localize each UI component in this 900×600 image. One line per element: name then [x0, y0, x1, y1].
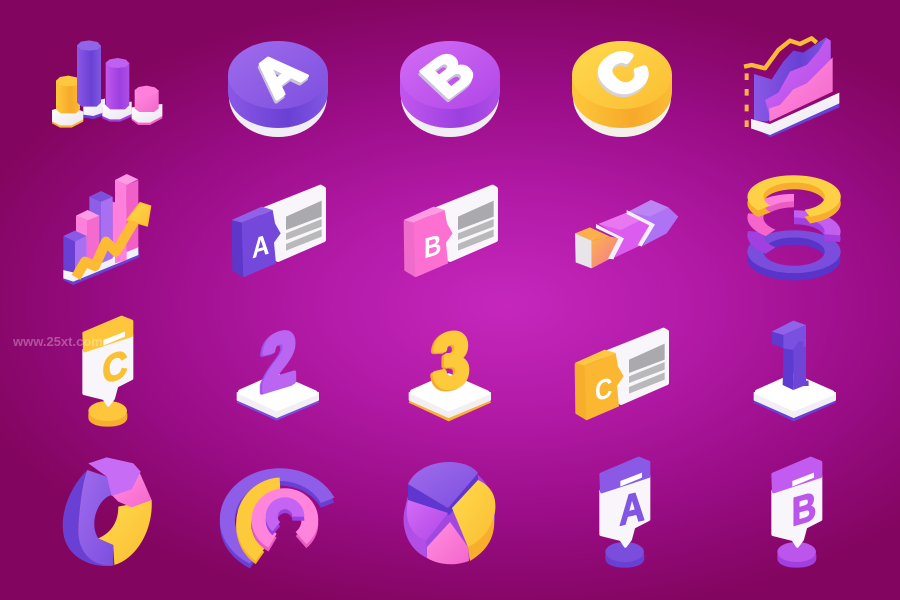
button base: [573, 57, 671, 137]
stand side: [605, 554, 644, 568]
number 2: 2: [262, 313, 296, 407]
grey line 1: [286, 219, 322, 240]
first chevron: [596, 224, 624, 259]
stand side: [777, 554, 816, 568]
icon: segmented arrow: [575, 200, 678, 268]
icon: number 3 on platform: [409, 316, 491, 421]
grey block: [458, 201, 494, 230]
purple arc top: [227, 475, 328, 558]
pink ring left part: [755, 214, 771, 233]
icon: button C: [572, 39, 672, 137]
icon: radial bar chart: [227, 475, 328, 563]
violet bar: [106, 63, 129, 109]
yellow segment: [98, 500, 152, 565]
number 1 flag left: [772, 332, 783, 348]
platform side: [237, 393, 318, 417]
card white body: [434, 187, 496, 260]
platform edge: [237, 383, 319, 421]
purple wedge side: [408, 473, 478, 515]
card side: [233, 221, 243, 276]
pink arc top: [260, 496, 310, 541]
card front: [242, 210, 281, 277]
platform top: [758, 376, 832, 409]
violet wedge: [407, 500, 448, 541]
letter B: B: [792, 484, 816, 536]
second segment: [598, 213, 653, 257]
letter A: A: [240, 41, 317, 108]
number 3: 3: [434, 316, 469, 404]
blue ring top: [755, 234, 833, 269]
pink bar base: [132, 105, 162, 125]
card top edge: [232, 207, 273, 223]
pie silhouette: [405, 464, 495, 564]
cap label bar: [620, 473, 642, 487]
letter C: C: [583, 39, 663, 108]
button top: [228, 41, 328, 109]
card side: [576, 364, 586, 419]
card side: [405, 221, 415, 276]
grey line 2: [629, 372, 665, 394]
stand top: [88, 401, 127, 421]
letter A: A: [619, 483, 645, 535]
platform edge: [754, 383, 836, 421]
yellow arc side: [244, 488, 280, 558]
button side: [400, 75, 500, 128]
button base: [401, 57, 499, 137]
icon: info card A: [232, 187, 324, 277]
number 1 flag front: [783, 325, 806, 350]
purple segment: [78, 470, 113, 566]
yellow bar: [56, 81, 80, 113]
cap: [773, 458, 821, 492]
icon: pin A: [601, 458, 649, 568]
cap label bar: [792, 473, 814, 487]
icon: info card B: [404, 187, 496, 277]
number 1 top face: [772, 321, 806, 335]
yellow ring top: [755, 179, 833, 213]
card white body: [605, 330, 667, 403]
violet bar base: [102, 103, 132, 122]
second segment top: [598, 213, 641, 230]
pin body: [773, 476, 821, 546]
violet wedge side: [404, 500, 427, 558]
icon: area chart: [744, 37, 839, 137]
blue area: [754, 37, 831, 122]
letter C: C: [103, 341, 127, 392]
violet ring right top: [794, 214, 833, 235]
pin body: [84, 335, 132, 405]
button side: [228, 75, 328, 128]
pink bar: [76, 216, 88, 272]
card top edge: [404, 207, 445, 223]
icon: number 1 on platform: [754, 321, 836, 421]
icon: number 2 on platform: [237, 313, 319, 421]
violet arc side: [272, 507, 298, 531]
base: [751, 93, 839, 135]
purple bar: [63, 236, 75, 272]
icon: ring chart: [63, 457, 152, 566]
purple wedge: [408, 462, 478, 508]
pink wedge: [427, 522, 469, 564]
icon: button A: [228, 41, 328, 137]
card front: [585, 353, 624, 420]
first segment white face: [575, 233, 592, 268]
third segment: [628, 200, 678, 246]
yellow arrow line: [76, 220, 135, 277]
first segment top: [575, 227, 610, 241]
grey block: [629, 344, 665, 373]
platform side: [409, 393, 490, 417]
icon: stacked rings: [755, 179, 833, 277]
platform edge: [409, 383, 491, 421]
violet ring left part: [755, 232, 771, 250]
second chevron: [627, 210, 655, 247]
pink area: [769, 57, 833, 122]
purple arc side: [227, 479, 328, 563]
grey line 2: [286, 229, 322, 251]
watermark: www.25xt.com: [12, 334, 103, 349]
pink segment: [112, 473, 152, 507]
cap label bar: [103, 332, 125, 346]
number 1 stem left: [783, 348, 793, 390]
trend line: [744, 38, 817, 68]
third segment top: [628, 200, 668, 217]
label B: B: [424, 228, 441, 265]
icon: pin B: [773, 458, 821, 568]
button base: [229, 57, 327, 137]
number 1 glyph: 1: [791, 328, 810, 403]
pink ring back top: [764, 198, 794, 204]
base: [63, 247, 138, 282]
violet bar: [89, 197, 101, 268]
base edge: [751, 100, 839, 137]
card front: [414, 210, 453, 277]
violet segment: [88, 457, 141, 496]
icon: pie chart: [404, 462, 495, 564]
yellow arc top: [244, 485, 280, 555]
base edge: [63, 252, 139, 285]
icon: info card C: [575, 330, 667, 420]
purple bar: [77, 45, 101, 107]
violet arc top: [272, 503, 298, 527]
icon: button B: [400, 41, 500, 137]
card top edge: [575, 350, 616, 366]
platform top: [241, 376, 315, 409]
grey line 1: [629, 362, 665, 383]
grey line 2: [458, 229, 494, 251]
purple bar base: [83, 100, 105, 119]
dashed axis: [741, 73, 753, 128]
stand top: [605, 542, 644, 562]
purple segment side: [63, 470, 113, 566]
pink ring back part: [764, 204, 794, 210]
label C: C: [595, 371, 612, 408]
yellow wedge: [452, 480, 495, 547]
icon: hexagonal bar chart: [52, 40, 162, 128]
icon: pin C: [84, 317, 132, 427]
tall pink bar: [115, 180, 127, 263]
cap: [601, 458, 649, 492]
pin body: [601, 476, 649, 546]
label A: A: [252, 228, 269, 265]
yellow ring side: [755, 186, 833, 220]
cap: [84, 317, 132, 351]
button side: [572, 75, 672, 128]
yellow wedge side: [468, 510, 494, 561]
card white body: [262, 187, 324, 260]
first segment right face: [592, 237, 620, 268]
stand side: [88, 413, 127, 427]
yellow arrow head: [127, 203, 151, 226]
short pink bar: [113, 202, 127, 257]
violet ring right part: [794, 221, 833, 241]
button top: [572, 41, 672, 109]
violet area: [765, 38, 831, 117]
blue ring side: [755, 241, 833, 277]
yellow bar base: [52, 109, 83, 128]
button top: [400, 41, 500, 109]
number 1 stem right: [793, 347, 806, 390]
pink bar: [135, 90, 159, 112]
pink arc side: [260, 500, 310, 545]
grey line 1: [458, 219, 494, 240]
platform top: [413, 376, 487, 409]
icon: growth bar chart with arrow: [63, 174, 151, 285]
letter B: B: [410, 41, 487, 108]
stand top: [777, 542, 816, 562]
platform side: [754, 393, 835, 417]
grey block: [286, 201, 322, 230]
